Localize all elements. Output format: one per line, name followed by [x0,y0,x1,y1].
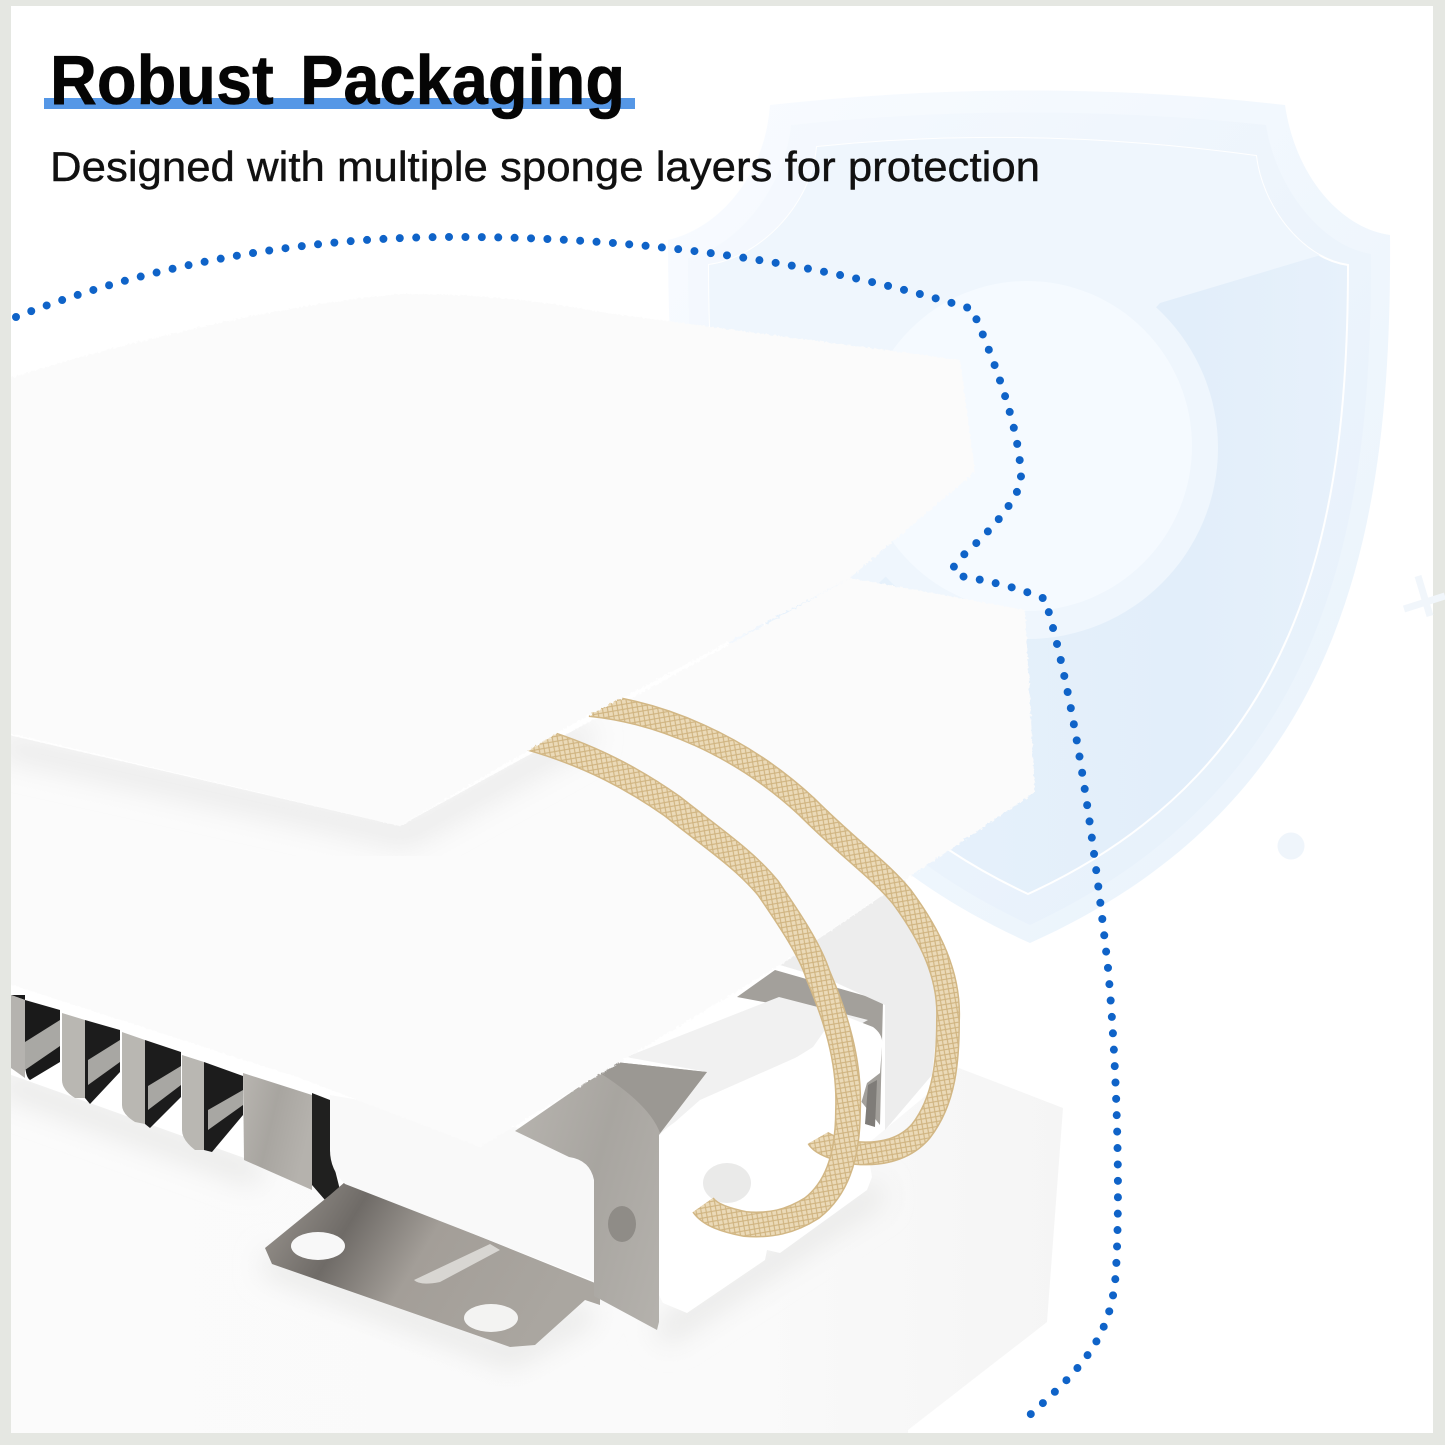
title underline [44,98,635,109]
bottom sponge layer [11,1068,1063,1406]
dotted protection outline [16,237,1118,1422]
photo: packaged igniter in sponges [0,294,1063,1445]
ceramic body side [330,1150,494,1242]
ceramic front face [658,1013,882,1313]
cable: front wire [530,738,848,1224]
front bracket [515,1062,707,1330]
subtitle: Designed with multiple sponge layers for protection [50,143,1040,190]
ceramic block [626,997,882,1313]
bracket screw hole [608,1206,636,1242]
cable: rear wire [590,705,948,1153]
icon: faint plus mark [1404,576,1445,616]
back bracket [737,970,883,1125]
ceramic top face [626,997,868,1137]
comb teeth metal [11,995,340,1200]
mounting flange with holes [265,1182,600,1347]
underside shadow of middle sponge [780,880,940,1130]
icon: protective shield [668,90,1390,943]
bracket flap [600,1062,707,1133]
top sponge layer [394,326,892,826]
title [44,41,635,119]
icon: faint dot [1278,832,1304,860]
middle sponge layer [0,578,1035,1147]
ceramic wire hole [703,1163,751,1203]
title text: Robust Packaging [50,41,625,119]
ceramic slot [865,1080,877,1127]
